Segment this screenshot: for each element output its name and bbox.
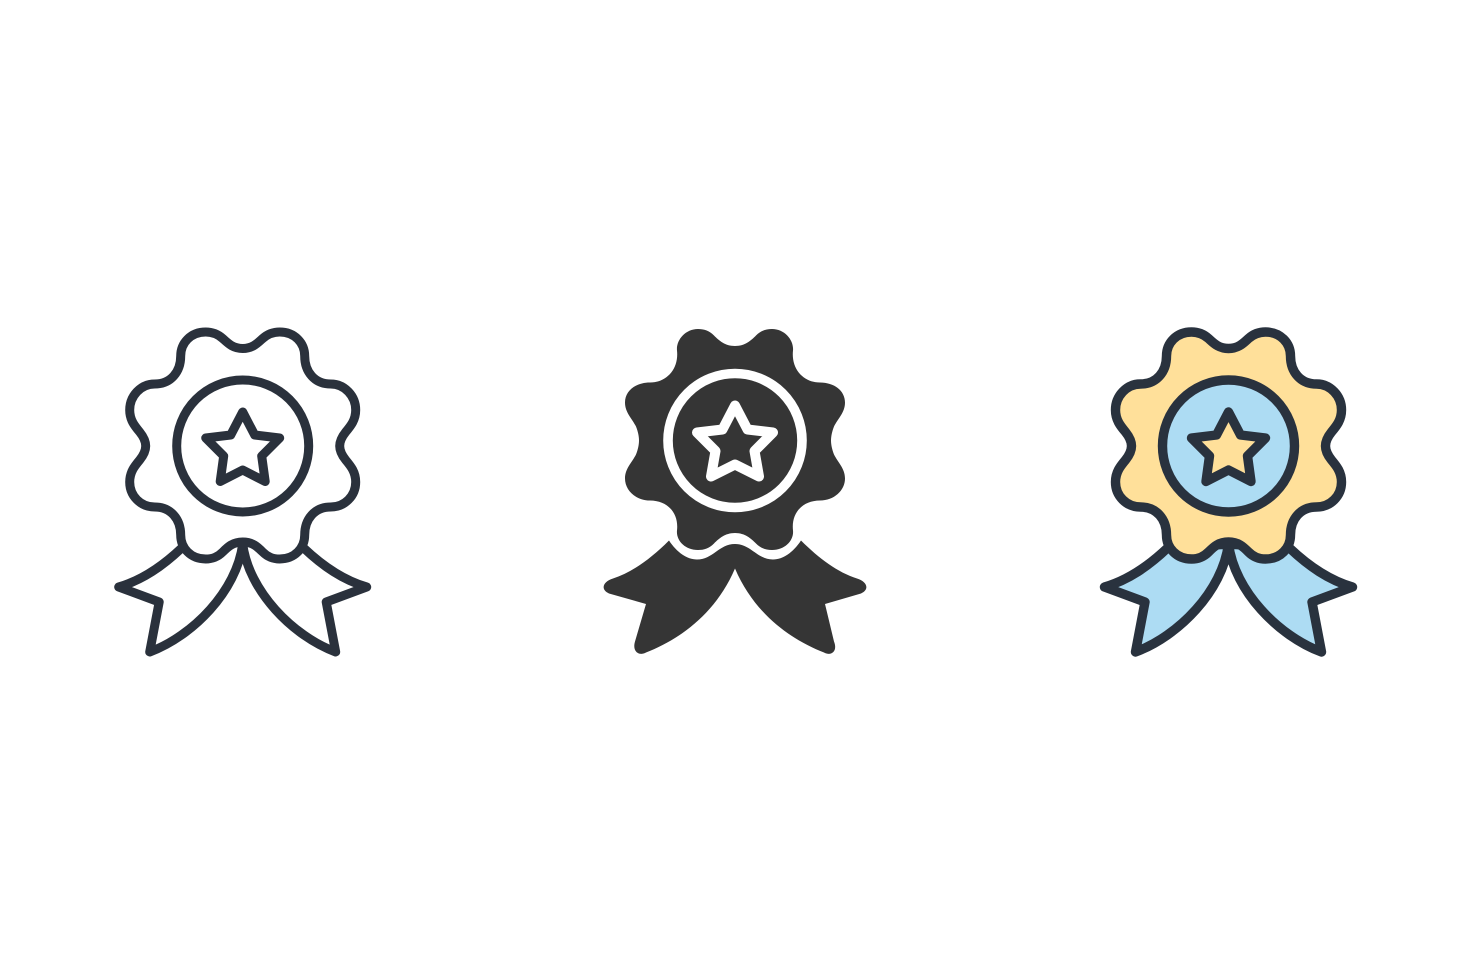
ribbons	[604, 540, 866, 654]
right ribbon	[1228, 544, 1352, 652]
star	[206, 412, 280, 482]
white ring	[668, 374, 802, 508]
rosette body	[625, 329, 845, 550]
left ribbon	[119, 544, 243, 652]
inner circle	[1162, 380, 1294, 512]
icon: solid rosette badge	[604, 329, 866, 654]
icon: outline rosette badge	[119, 332, 367, 652]
rosette edge	[1116, 332, 1342, 559]
star	[1192, 412, 1266, 482]
right ribbon	[243, 544, 367, 652]
inner circle	[177, 380, 309, 512]
icon: coloured rosette badge	[1104, 332, 1352, 652]
left ribbon	[1104, 544, 1228, 652]
rosette edge	[130, 332, 356, 559]
star	[697, 406, 773, 476]
